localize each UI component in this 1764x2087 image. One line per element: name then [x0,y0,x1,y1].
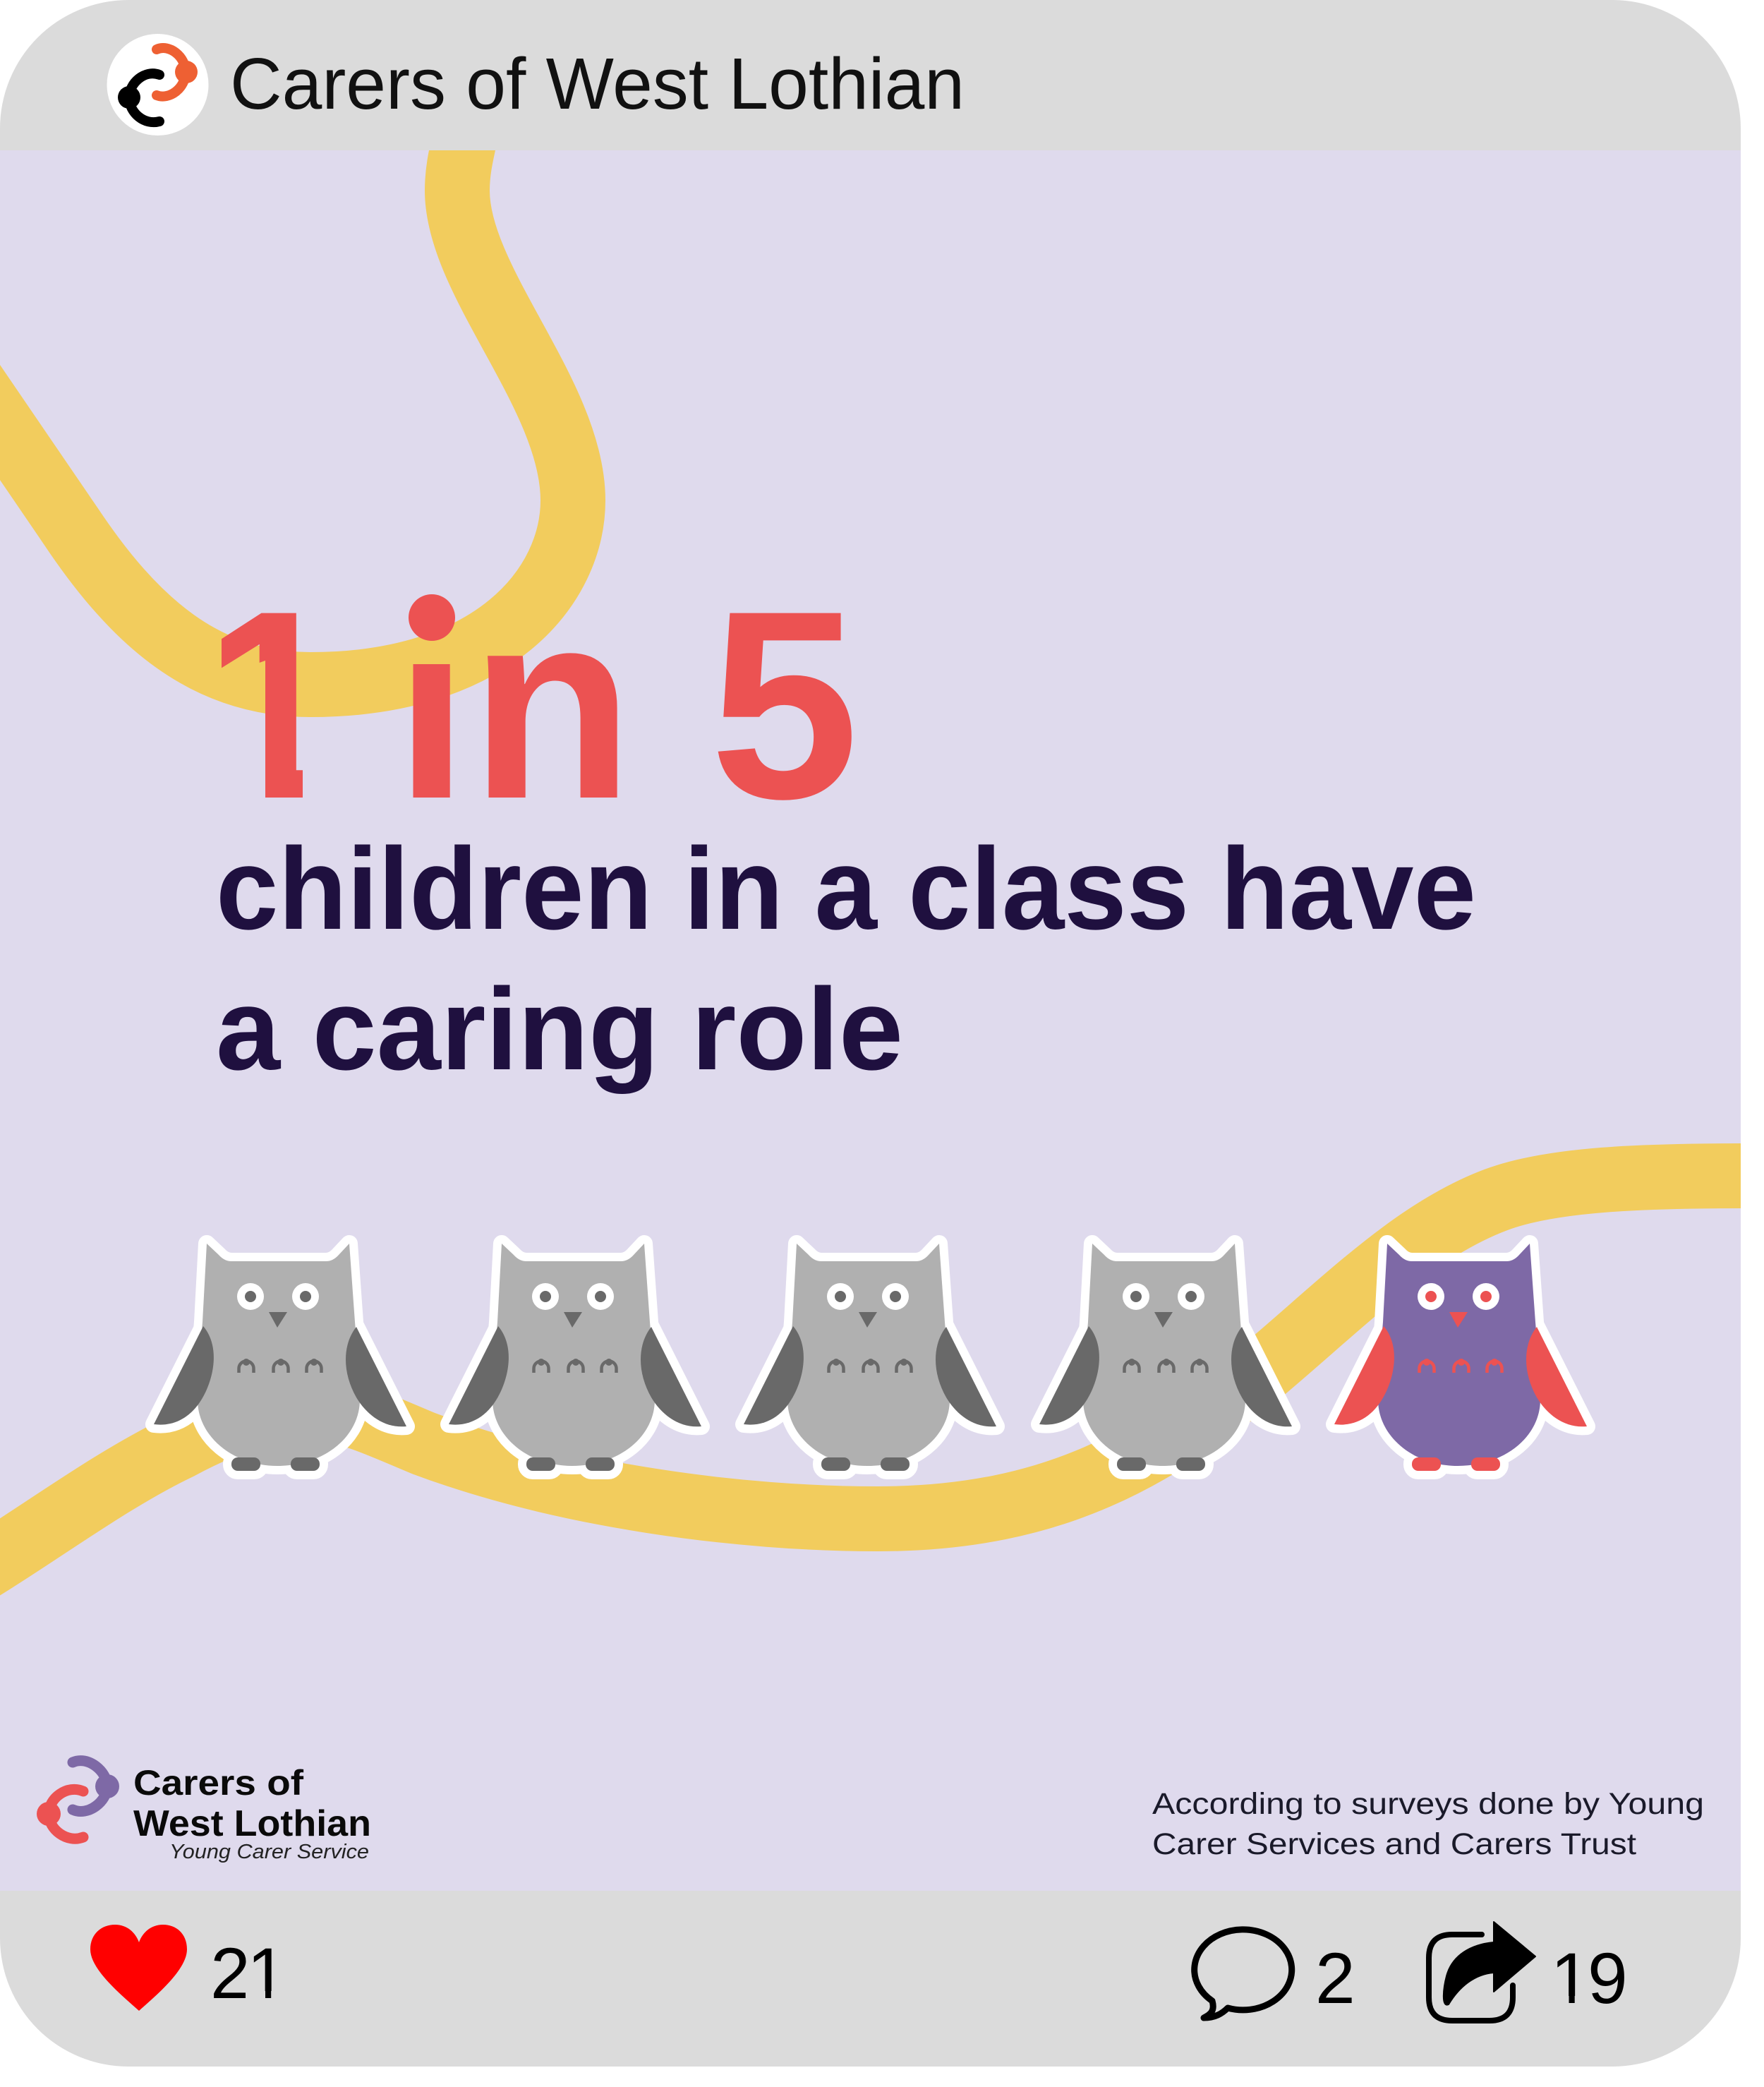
heading: line 1: children in a class have [216,824,1476,954]
likes count: 21 [210,1933,287,2014]
source note: Carer Services and Carers Trust [1152,1827,1636,1861]
icon: comment bubble [1195,1930,1292,2018]
logo text: West Lothian: West Lothian [133,1803,371,1844]
owl 3 grey [744,1244,996,1471]
source note [1152,1787,1704,1861]
icon: header logo [107,34,209,136]
source note: According to surveys done by Young [1152,1787,1704,1821]
headline statistic [222,594,852,800]
decorative yellow ribbon: top [0,134,573,685]
icon: share arrow [1429,1922,1535,2021]
owl 5 purple highlighted [1334,1244,1587,1471]
owl row: five owls [154,1244,1587,1471]
logo text: Young Carer Service: Young Carer Service [169,1841,369,1863]
decorative yellow ribbon: bottom [0,1176,1750,1570]
owl 4 grey [1039,1244,1292,1471]
icon: heart [90,1925,187,2011]
logo: Carers of West Lothian Young Carer Service [37,1761,371,1863]
owl 1 grey [154,1244,406,1471]
header: account row [107,34,965,136]
headline statistic: 1 in 5 [197,555,859,855]
owl 2 grey [449,1244,701,1471]
shares count: 19 [1551,1938,1628,2019]
comments count: 2 [1315,1938,1355,2019]
heading: line 2: a caring role [216,964,903,1094]
icon: logo mark [37,1761,119,1839]
header account name: Carers of West Lothian [230,43,965,124]
logo text: Carers of: Carers of [133,1763,303,1803]
